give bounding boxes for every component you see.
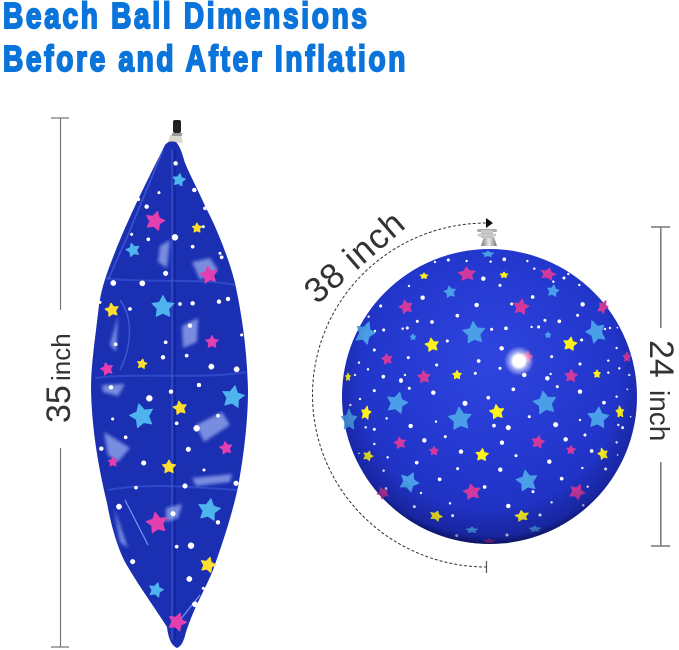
inflated ball body xyxy=(342,249,637,544)
icon: inflated ball valve xyxy=(477,229,497,246)
deflated height dimension: 35 inch: 35 xyxy=(40,385,78,423)
inflated beach ball xyxy=(341,229,637,544)
circumference dimension: 38 inch xyxy=(297,204,493,573)
inflated height dimension: 24 inch: 24 xyxy=(642,340,679,378)
inflated ball dots xyxy=(343,258,631,537)
deflated ball body xyxy=(91,141,248,648)
icon: deflated ball valve xyxy=(168,120,183,143)
specular highlight xyxy=(504,346,534,376)
title xyxy=(3,0,405,79)
inflated ball stars xyxy=(341,251,631,543)
deflated ball stars xyxy=(99,173,246,632)
inflated height dimension: 24 inch xyxy=(642,227,679,546)
deflated ball dots xyxy=(99,161,243,607)
plastic creases and highlights xyxy=(95,150,246,640)
deflated height dimension: 35 inch xyxy=(40,118,78,647)
deflated beach ball xyxy=(91,120,248,648)
deflated height dimension: 35 inch: inch xyxy=(46,333,76,381)
ball edge shading xyxy=(342,249,637,544)
circumference dimension: 38 inch: 38 inch xyxy=(297,204,412,311)
inflated height dimension: 24 inch: inch xyxy=(644,390,675,441)
title: Before and After Inflation xyxy=(3,39,405,79)
